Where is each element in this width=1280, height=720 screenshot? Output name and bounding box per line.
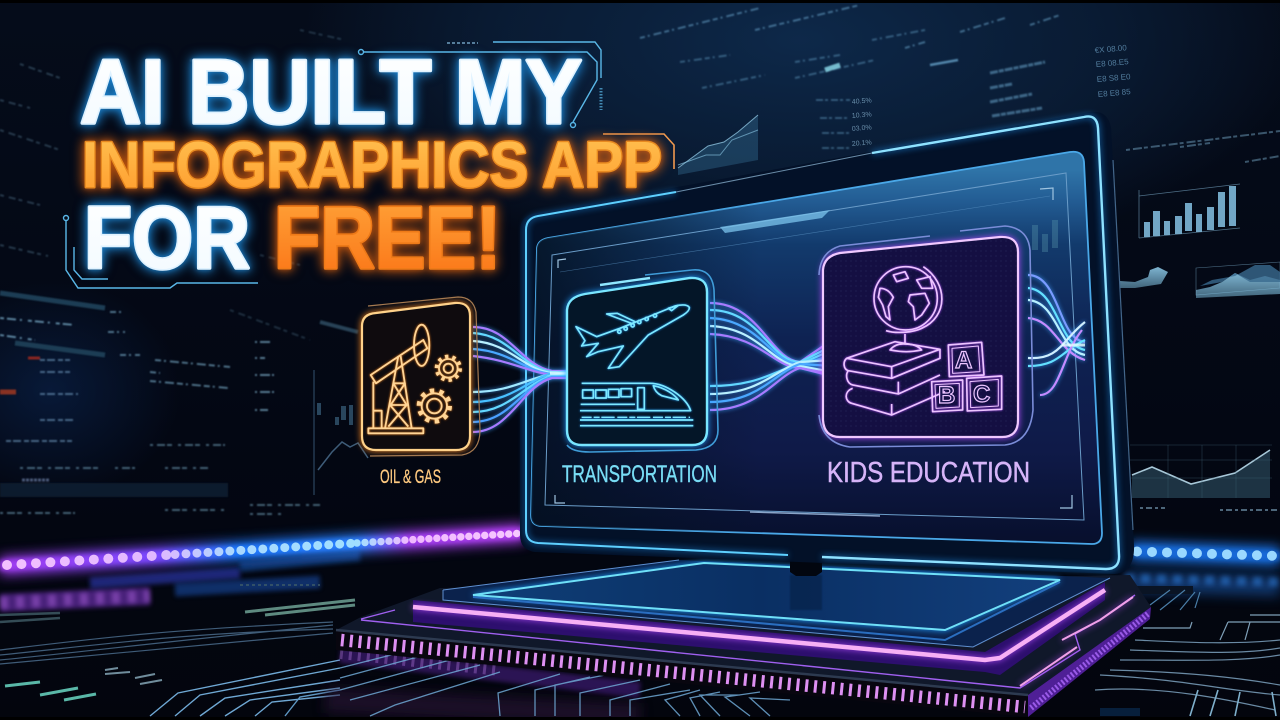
title line 1: AI BUILT MY	[80, 42, 582, 143]
LED strip right	[1130, 551, 1280, 556]
background bar chart right	[1126, 131, 1280, 238]
background area chart top	[678, 115, 758, 175]
base side face	[1028, 607, 1151, 717]
block letters: B	[938, 382, 955, 409]
background data readouts left	[0, 30, 358, 514]
circuit board floor right	[1095, 578, 1280, 716]
monitor stand	[790, 548, 822, 576]
inner frame	[545, 173, 1084, 520]
background percent list	[852, 97, 872, 148]
base top surface	[336, 575, 1151, 695]
monitor neon outline	[526, 116, 1119, 569]
background area charts right	[1120, 262, 1280, 298]
monitor body	[520, 112, 1134, 574]
pad neon outline	[473, 563, 1060, 630]
title brackets blue	[64, 42, 601, 288]
base front LED bars	[336, 630, 1028, 717]
icon: airplane and train	[576, 305, 693, 426]
title line 3 orange: FREE!	[274, 188, 501, 287]
block letters: A	[955, 347, 972, 374]
background list right: €X 08.00	[1094, 43, 1128, 55]
background percent list: 03.0%	[852, 124, 872, 133]
background list right	[1094, 43, 1132, 99]
chip base	[336, 575, 1151, 717]
label: TRANSPORTATION	[562, 461, 717, 488]
background percent list: 40.5%	[852, 97, 872, 106]
background percent list: 20.1%	[852, 139, 872, 148]
circuit board floor left	[0, 556, 360, 716]
label: KIDS EDUCATION	[827, 457, 1030, 489]
ghost chart in panel	[1032, 220, 1058, 252]
block letters: C	[973, 381, 990, 408]
connector ribbons exit from kids	[1028, 275, 1085, 395]
block letters	[938, 347, 990, 409]
monitor	[520, 112, 1134, 574]
circuit board floor center	[325, 653, 790, 716]
neon pink line	[413, 590, 1105, 660]
LED strip left	[0, 533, 525, 566]
title	[80, 42, 662, 287]
icon: globe books and ABC blocks	[844, 267, 1002, 415]
glass pad	[443, 560, 1110, 647]
background line chart right	[1130, 445, 1280, 510]
title bracket orange	[603, 134, 674, 169]
connector ribbons transport to kids	[710, 303, 832, 410]
background mini chart left	[314, 370, 368, 495]
glass panel	[531, 152, 1102, 544]
card frame	[823, 237, 1018, 437]
background list right: E8 E8 85	[1097, 87, 1132, 99]
title line 3 white: FOR	[84, 188, 250, 287]
background list right: E8 08.E5	[1095, 57, 1130, 69]
background data readouts top	[640, 5, 1060, 148]
card: oil & gas	[362, 297, 480, 488]
purple layer	[413, 582, 1105, 675]
card frame	[362, 303, 470, 450]
background percent list: 10.3%	[852, 111, 872, 120]
card frame	[567, 278, 707, 445]
icon: oil pump with gears	[368, 325, 460, 433]
label: OIL & GAS	[380, 467, 441, 488]
title line 2: INFOGRAPHICS APP	[82, 128, 662, 201]
purple circuit edge	[361, 595, 1135, 688]
connector ribbons oil to transport	[473, 327, 585, 432]
card: transportation	[562, 270, 718, 488]
pink circuit edge highlight	[1020, 597, 1133, 686]
background list right: E8 S8 E0	[1096, 72, 1131, 84]
card: kids education	[819, 226, 1033, 489]
